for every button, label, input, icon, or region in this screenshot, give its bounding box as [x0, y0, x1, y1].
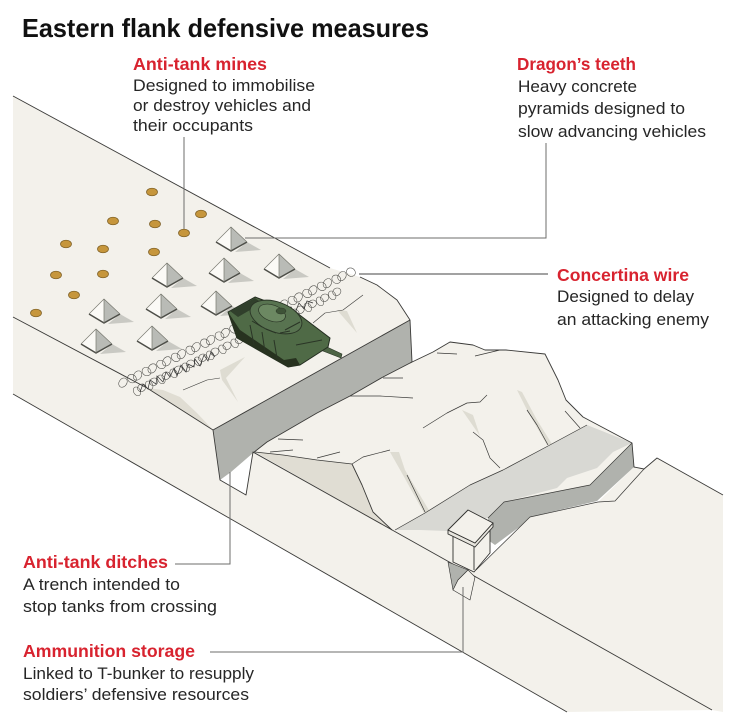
tank barrel	[310, 340, 342, 358]
title: Eastern flank defensive measures	[22, 13, 429, 43]
panel: ditch near wall	[213, 320, 412, 480]
tank hatch	[276, 308, 286, 314]
ground cracks	[220, 310, 552, 513]
label: anti-tank ditches: A trench intended to	[23, 576, 180, 594]
label: anti-tank mines: Designed to immobilise	[133, 77, 315, 95]
label: anti-tank mines: or destroy vehicles and	[133, 97, 311, 115]
label: dragon's teeth: pyramids designed to	[518, 100, 685, 118]
label: ammunition storage	[23, 641, 255, 704]
icon: concertina wire	[119, 268, 355, 396]
label: dragon's teeth: Heavy concrete	[518, 78, 637, 96]
icon: ammunition storage bunker	[448, 510, 493, 600]
label: anti-tank ditches: Anti-tank ditches	[23, 552, 168, 572]
bunker trench	[448, 562, 468, 590]
label: anti-tank mines: their occupants	[133, 117, 253, 135]
label: concertina wire: Concertina wire	[557, 265, 689, 285]
panel: ditch floor	[395, 425, 632, 531]
bunker shaft	[453, 530, 490, 572]
label: concertina wire	[557, 265, 710, 329]
bunker cap	[448, 523, 493, 547]
label: anti-tank mines	[133, 54, 315, 135]
label: concertina wire: an attacking enemy	[557, 311, 710, 329]
label: ammunition storage: Ammunition storage	[23, 641, 195, 661]
label: concertina wire: Designed to delay	[557, 288, 695, 306]
tank hull	[228, 297, 330, 367]
tank turret	[245, 294, 307, 340]
tank hull panels	[250, 321, 322, 358]
label: ammunition storage: Linked to T-bunker to resupply	[23, 665, 255, 683]
panel: strip beside far wall	[598, 467, 644, 502]
label: anti-tank ditches: stop tanks from crossing	[23, 598, 217, 616]
panel: far mound	[255, 342, 632, 577]
panel: ditch far wall	[488, 443, 634, 545]
icon: tank	[228, 294, 342, 367]
icon: anti-tank mines	[30, 188, 206, 317]
label: anti-tank ditches	[23, 552, 217, 616]
label: dragon's teeth: Dragon’s teeth	[517, 54, 636, 74]
panel: tan slopes	[147, 388, 392, 530]
label: ammunition storage: soldiers’ defensive resources	[23, 686, 249, 704]
label: anti-tank mines: Anti-tank mines	[133, 54, 267, 74]
panel: far ground slab	[476, 458, 723, 712]
icon: dragon's teeth pyramids	[81, 227, 309, 354]
leader lines	[175, 137, 548, 652]
label: dragon's teeth: slow advancing vehicles	[518, 123, 706, 141]
bunker store	[453, 570, 475, 600]
label: dragon's teeth	[517, 54, 706, 141]
tank engine deck	[230, 298, 262, 317]
tank track shadow	[228, 312, 300, 367]
